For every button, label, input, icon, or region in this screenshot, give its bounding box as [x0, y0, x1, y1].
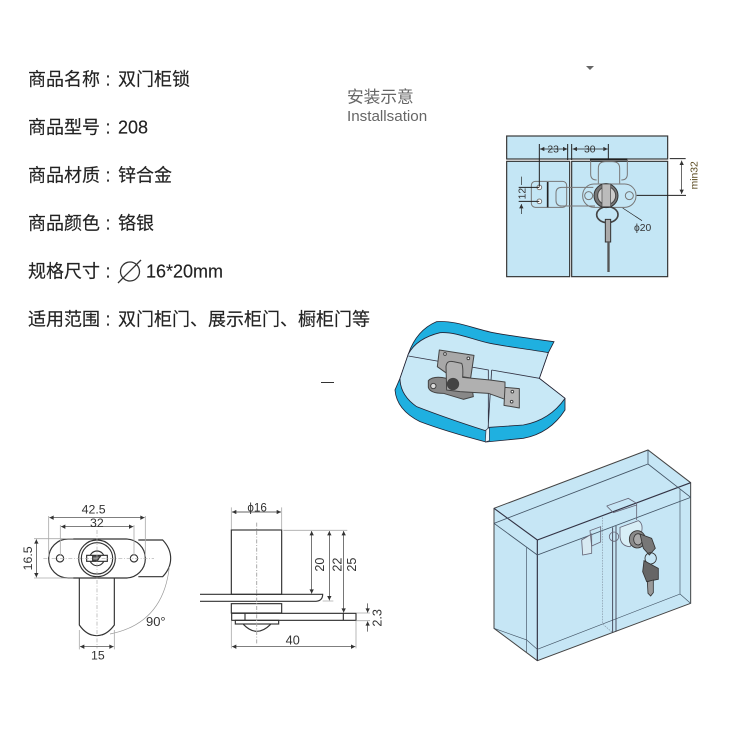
dimension labels: 23 — [547, 145, 559, 156]
spec: material: : — [106, 166, 111, 186]
key set — [629, 531, 658, 596]
dimension labels: min32 — [689, 161, 700, 189]
heading: installation: Installsation — [347, 108, 427, 125]
dimension labels — [247, 501, 385, 647]
spec: material: 商品材质 — [28, 166, 100, 186]
spec: size: 规格尺寸 — [28, 262, 100, 282]
spec: usage range: 双门柜门、展示柜门、橱柜门等 — [118, 310, 370, 330]
dimension labels: 22 — [331, 558, 345, 572]
dimension labels: 20 — [313, 558, 327, 572]
door gap lines — [408, 356, 539, 441]
small triangle mark — [586, 66, 594, 70]
diagram: side view of lock with dimensions — [200, 501, 385, 648]
spec: usage range: : — [106, 310, 111, 330]
centre lines and rotation arc — [43, 530, 154, 648]
centre line — [255, 523, 258, 643]
heading: installation: 安装示意 — [347, 88, 414, 106]
dimension lines — [519, 144, 686, 221]
heading: installation — [347, 88, 427, 125]
dimension labels: ϕ16 — [247, 501, 267, 514]
glass edge, cyan — [395, 321, 565, 442]
glass panels — [507, 136, 668, 277]
lock cylinder and key — [594, 184, 618, 272]
glass top face — [400, 333, 565, 431]
lock cylinder — [231, 530, 282, 594]
diagram: lock mounted on wavy glass — [395, 321, 565, 442]
door panel edge — [200, 594, 323, 601]
spec: product name: 双门柜锁 — [118, 70, 190, 90]
spec: model number: : — [106, 118, 111, 138]
dimension labels: 42.5 — [82, 502, 106, 516]
spec: size: 16*20mm — [146, 262, 223, 282]
diagram: installation dimensions on glass doors — [507, 136, 700, 277]
dimension labels — [517, 145, 700, 234]
dimension labels: 30 — [584, 145, 596, 156]
vertical latch arm — [79, 578, 114, 636]
latch stack — [231, 604, 356, 631]
dimension labels: 25 — [345, 558, 359, 572]
spec: product name: 商品名称 — [28, 70, 100, 90]
dimension labels: 2.3 — [371, 609, 385, 627]
rotated latch arm — [138, 540, 171, 577]
dimension labels: 40 — [286, 633, 300, 647]
dimension lines — [34, 516, 145, 649]
diagram: glass cabinet with lock and keys — [494, 450, 691, 661]
dimension labels: 16.5 — [21, 546, 35, 570]
keyway cylinder — [56, 540, 138, 577]
spec: size: : — [106, 262, 111, 282]
dimension labels: 12 — [517, 188, 528, 199]
spec: colour: : — [106, 214, 111, 234]
dimension lines — [231, 507, 370, 648]
dimension labels: ϕ20 — [634, 223, 652, 234]
dimension labels: 32 — [90, 516, 104, 530]
spec: model number: 208 — [118, 118, 148, 138]
door gap — [613, 526, 616, 633]
product specification list — [28, 70, 370, 330]
dimension labels — [21, 502, 166, 663]
spec: product name: : — [106, 70, 111, 90]
cabinet faces — [494, 450, 691, 661]
icon: diameter symbol — [118, 260, 141, 283]
diagram: front view of lock with dimensions — [21, 502, 171, 663]
spec: model number: 商品型号 — [28, 118, 100, 138]
spec: material: 锌合金 — [118, 166, 172, 186]
dimension labels: 15 — [91, 649, 105, 663]
spec: colour: 商品颜色 — [28, 214, 100, 234]
spec: usage range: 适用范围 — [28, 310, 100, 330]
lock hardware — [428, 350, 519, 408]
spec: size — [28, 260, 223, 283]
catch plate on left door — [531, 160, 636, 207]
spec: colour: 铬银 — [118, 214, 154, 234]
small dash mark — [321, 382, 334, 384]
lock hardware — [582, 498, 642, 555]
lock body plate — [49, 539, 145, 578]
dimension labels: 90° — [146, 614, 166, 629]
